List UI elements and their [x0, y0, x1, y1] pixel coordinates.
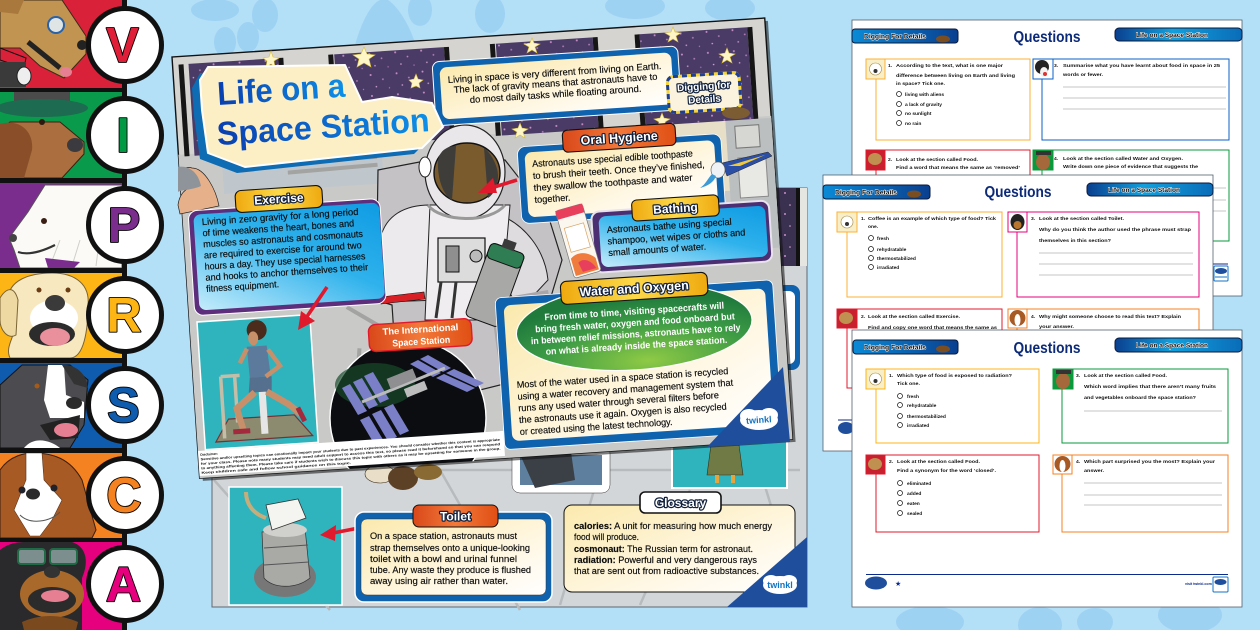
letter: I — [88, 98, 162, 172]
text: oral hygiene: to brush their teeth. Once they’ve finished, — [533, 159, 705, 181]
mud piles — [365, 464, 442, 490]
disclaimer strip: Keep children safe and follow school guidance on this topic. — [201, 461, 351, 475]
letter: P: P — [108, 199, 140, 253]
question 1: fresh — [907, 394, 919, 400]
header: life on a space station — [1115, 28, 1242, 41]
heading: glossary: Glossary — [655, 496, 707, 510]
question 4 — [1008, 309, 1199, 369]
panel: intro — [432, 46, 682, 126]
twinkl corner: back page: twinkl — [767, 580, 793, 590]
text: oral hygiene: they swallow the toothpaste and water — [533, 172, 693, 193]
text: toilet — [370, 530, 531, 586]
question 3: Look at the section called Food. — [1084, 373, 1168, 379]
panel: bathing — [590, 191, 773, 273]
question 1: 1. — [888, 63, 893, 69]
text: water and oxygen: runs any used water through several filters before — [518, 389, 719, 413]
icon: white samoyed dog — [9, 185, 122, 268]
question 2: Find and copy one word that means the same as — [868, 325, 997, 331]
text: glossary: food will produce. — [574, 531, 639, 542]
question 3: Summarise what you have learnt about food in space in 25 — [1063, 63, 1220, 69]
icon: flexed arm — [178, 167, 219, 214]
badge: digging for details — [667, 72, 741, 113]
header: life on a space station: Life on a Space Station — [1108, 187, 1180, 194]
heading: bathing: Bathing — [653, 200, 698, 217]
header: digging for details — [852, 29, 958, 43]
letter: P — [88, 188, 162, 262]
green ellipse callout: on what is already inside the space station. — [545, 334, 728, 357]
header: digging for details — [823, 185, 930, 199]
letter: C: C — [106, 469, 142, 523]
twinkl corner: front page — [707, 367, 790, 447]
image: runner on treadmill — [197, 315, 318, 450]
question 2: Find a word that means the same as ‘removed’ — [896, 165, 1021, 171]
question 1: difference between living on Earth and living — [896, 73, 1015, 79]
arrow: to astronaut — [478, 178, 517, 193]
text: bathing: small amounts of water. — [608, 241, 706, 258]
disclaimer strip: Disclaimer: — [200, 452, 218, 457]
question 1: rehydratable — [877, 247, 907, 253]
header: life on a space station — [1087, 183, 1213, 196]
label: international space station: The International — [382, 321, 459, 337]
letter: A: A — [106, 558, 141, 612]
question 4 — [1033, 150, 1229, 241]
heading: toilet — [413, 505, 498, 527]
text: exercise: muscles so astronauts and cosmonauts — [203, 228, 364, 249]
question 4: Look at the section called Water and Oxygen. — [1063, 156, 1184, 162]
icon: shampoo bottle — [555, 203, 601, 278]
text: water and oxygen: the astronauts use it again. Oxygen is also recycled — [519, 401, 727, 425]
heading: exercise — [235, 185, 323, 213]
text: bathing — [606, 215, 746, 258]
question 3: Which word implies that there aren’t many fruits — [1084, 384, 1216, 390]
header: digging for details: Digging For Details — [864, 34, 926, 40]
footer: ★ — [895, 580, 901, 588]
icon: cavalier spaniel dog — [0, 453, 96, 538]
badge: digging for details: Digging for — [677, 80, 731, 94]
question 1 — [866, 369, 1039, 443]
question 3 — [1053, 369, 1228, 443]
question 2: 2. — [889, 459, 894, 465]
question 4: Why might someone choose to read this text? Explain — [1039, 314, 1181, 320]
question 2: eliminated — [907, 481, 931, 487]
heading: water and oxygen: Water and Oxygen — [579, 278, 689, 299]
question 4 — [1053, 455, 1228, 532]
question 1: no sunlight — [905, 111, 932, 117]
panel fragment: blue framed box — [752, 285, 800, 370]
text: exercise: fitness equipment. — [206, 278, 279, 294]
panel: glossary — [564, 492, 795, 592]
twinkl corner: front page: twinkl — [746, 414, 772, 426]
text: bathing: Astronauts bathe using special — [606, 216, 732, 235]
question 4: Write down one piece of evidence that suggests the — [1063, 164, 1198, 170]
text: toilet: tube. Any waste they produce is flushed — [370, 564, 531, 575]
letter: S — [88, 368, 162, 442]
icon: badge — [1214, 266, 1228, 281]
disclaimer strip: to anything affecting them. Please take care if students wish to discuss this topic with others as it may be upsetting for someone in the group. — [201, 447, 501, 470]
question 1 — [837, 212, 1002, 297]
text: toilet: strap themselves onto a unique-looking — [370, 542, 530, 553]
question 3: words or fewer. — [1062, 72, 1104, 78]
heading: bathing — [631, 195, 720, 221]
poster background — [172, 18, 796, 481]
text: water and oxygen: or created using the latest technology. — [519, 416, 673, 437]
question 1: no rain — [905, 121, 921, 127]
question 4: 4. — [1031, 314, 1036, 320]
text: toilet: toilet with a bowl and urinal funnel — [370, 553, 517, 564]
question 4: 4. — [1054, 156, 1059, 162]
question 2: Find a synonym for the word ‘closed’. — [897, 468, 997, 474]
heading: glossary — [640, 492, 721, 513]
text: exercise: are required to exercise for around two — [204, 239, 362, 261]
letter: A — [88, 548, 162, 620]
question 2: sealed — [907, 511, 922, 517]
footer — [865, 574, 1228, 592]
text: water and oxygen: Most of the water used in a space station is recycled — [516, 365, 729, 390]
question 3: Why do you think the author used the phrase must strap — [1039, 227, 1191, 233]
question 1 — [866, 59, 1030, 140]
disclaimer strip: Sensitive and/or upsetting topics can emotionally impact your students due to past experiences. You should consider whether this content is appropriate — [200, 438, 500, 461]
worksheet page 3 — [852, 330, 1242, 607]
label: international space station: Space Station — [392, 334, 451, 348]
header: digging for details: Digging For Details — [835, 190, 897, 196]
text: intro — [447, 60, 663, 106]
question 4: 4. — [1076, 459, 1081, 465]
question 4: Which part surprised you the most? Explain your — [1084, 459, 1215, 465]
icon: bloodhound dog with hat — [0, 92, 88, 178]
header: digging for details: Digging For Details — [864, 344, 926, 352]
question 4: your answer. — [1039, 324, 1075, 330]
question 3: 3. — [1054, 63, 1059, 69]
VIPERS strip with dogs — [0, 0, 162, 630]
question 3: 3. — [1076, 373, 1081, 379]
footer logo — [838, 420, 854, 434]
letter: S: S — [107, 379, 140, 433]
icon: golden retriever dog — [0, 273, 88, 358]
text: oral hygiene: Astronauts use special edible toothpaste — [532, 147, 693, 169]
header: life on a space station: Life on a Space Station — [1136, 342, 1208, 350]
icon: border collie dog — [0, 365, 88, 448]
text: oral hygiene: together. — [534, 192, 571, 205]
text: water and oxygen — [516, 365, 736, 437]
text: exercise: and hooks to anchor themselves to their — [205, 261, 368, 283]
icon: toothpaste tube — [700, 152, 772, 188]
worksheet page 1 — [852, 20, 1242, 296]
green ellipse callout: in between relief missions, astronauts have to rely — [531, 321, 742, 346]
question 3: themselves in this section? — [1039, 238, 1111, 244]
image: toilet on teal — [229, 487, 342, 605]
question 2: Look at the section called Exercise. — [868, 314, 961, 320]
panel: exercise — [187, 181, 386, 316]
text: exercise: Living in zero gravity for a long period — [201, 206, 359, 227]
question 2: Look at the section called Food. — [896, 157, 979, 163]
twinkl corner: back page — [727, 537, 807, 607]
question 1: irradiated — [877, 265, 899, 271]
question 2: Look at the section called Food. — [897, 459, 981, 465]
text: oral hygiene — [532, 147, 706, 205]
heading: questions: Questions — [1014, 340, 1081, 357]
question 2 — [837, 309, 1002, 388]
question 1: 1. — [889, 373, 894, 379]
question 4: answer. — [1084, 468, 1105, 474]
white panel fragment with machinery — [512, 445, 610, 493]
question 1: irradiated — [907, 423, 929, 429]
text: exercise: of time weakens the heart, bones and — [202, 217, 354, 238]
heading: questions: Questions — [1014, 29, 1081, 46]
header: life on a space station — [1115, 338, 1242, 352]
panel: water and oxygen — [494, 268, 782, 450]
image fragment: teal panel with figure — [672, 430, 787, 488]
question 1: thermostabilized — [877, 256, 916, 262]
heading: toilet: Toilet — [440, 510, 471, 524]
green ellipse callout: bring fresh water, oxygen and food onboard but — [535, 310, 735, 334]
footer line — [1213, 263, 1228, 265]
text: exercise — [201, 205, 369, 294]
text: glossary: calories: A unit for measuring how much energy — [574, 520, 772, 531]
disclaimer strip — [198, 431, 505, 476]
text: glossary — [574, 520, 772, 576]
question 2: 2. — [861, 314, 866, 320]
text: toilet: away using air rather than water. — [370, 575, 508, 586]
question 1: 1. — [861, 216, 866, 222]
letter: R — [88, 278, 162, 352]
footer: visit twinkl.com — [1185, 582, 1212, 586]
panel: oral hygiene — [516, 120, 726, 224]
question 1: one. — [868, 225, 879, 230]
letter: R: R — [106, 289, 142, 343]
title: Life on a — [216, 67, 347, 112]
question 1: Which type of food is exposed to radiation? — [897, 373, 1012, 379]
question 3: Look at the section called Toilet. — [1039, 216, 1125, 222]
letter: C — [88, 458, 162, 532]
stars — [263, 27, 735, 138]
header: digging for details — [853, 340, 958, 354]
text: glossary: that are sent out from radioactive substances. — [574, 565, 759, 576]
icon: rottweiler dog with glasses — [0, 542, 86, 630]
poster page: back page with toilet and glossary — [212, 188, 807, 610]
text: intro: do most daily tasks while floating around. — [469, 83, 642, 105]
image: international space station — [329, 348, 487, 469]
question 2 — [866, 455, 1039, 532]
heading: water and oxygen — [560, 272, 708, 305]
question 1: rehydratable — [907, 403, 937, 409]
astronaut illustration — [376, 125, 562, 390]
question 1: According to the text, what is one major — [896, 63, 1003, 69]
text: glossary: radiation: Powerful and very dangerous rays — [574, 554, 757, 565]
icon: mud pile — [722, 107, 750, 119]
icon: oxygen tank — [465, 235, 528, 328]
panel: toilet — [355, 505, 552, 602]
heading: exercise: Exercise — [254, 190, 304, 208]
question 2: eaten — [907, 501, 920, 507]
letter: V — [88, 8, 162, 82]
question 1: in space? Tick one. — [896, 81, 946, 87]
header: life on a space station: Life on a Space Station — [1136, 32, 1208, 39]
heading: questions: Questions — [984, 184, 1052, 201]
disclaimer strip: for your class. Please note many students may need adult support to access this text, so please read it beforehand so that you can respond — [201, 442, 500, 466]
question 3 — [1008, 212, 1199, 297]
question 1: Coffee is an example of which type of food? Tick — [868, 216, 996, 222]
text: intro: Living in space is very different from living on Earth. — [447, 60, 662, 85]
letter: I: I — [116, 109, 130, 163]
heading: oral hygiene: Oral Hygiene — [580, 129, 658, 148]
text: exercise: hours a day. They use special harnesses — [204, 250, 366, 272]
question 3: and vegetables onboard the space station? — [1084, 395, 1196, 401]
arrow: to treadmill — [298, 287, 327, 330]
letter: V: V — [106, 19, 139, 73]
badge: digging for details: Details — [688, 93, 722, 107]
label: international space station — [368, 318, 473, 352]
poster page: main front page — [172, 18, 796, 496]
title — [192, 61, 443, 173]
green ellipse callout — [514, 276, 755, 378]
question 3: 3. — [1031, 216, 1036, 222]
text: glossary: cosmonaut: The Russian term for astronaut. — [574, 543, 753, 554]
question 1: a lack of gravity — [905, 102, 942, 108]
question 2: 2. — [888, 157, 893, 163]
question 1: fresh — [877, 236, 889, 242]
worksheet page 2 — [823, 175, 1213, 451]
heading: oral hygiene — [562, 123, 676, 152]
text: bathing: shampoo, wet wipes or cloths and — [607, 226, 746, 246]
text: water and oxygen: using a water recovery and management system that — [517, 377, 734, 402]
text: toilet: On a space station, astronauts must — [370, 530, 517, 541]
question 2: added — [907, 491, 921, 497]
question 1: living with aliens — [905, 92, 944, 98]
title: Space Station — [216, 101, 431, 152]
green ellipse callout: From time to time, visiting spacecrafts will — [544, 300, 724, 322]
question 1: Tick one. — [897, 381, 921, 387]
arrow: to toilet — [320, 525, 369, 541]
icon: terrier dog with glasses — [0, 0, 87, 87]
question 3 — [1033, 59, 1229, 140]
question 1: thermostabilized — [907, 414, 946, 420]
question 2 — [866, 150, 1030, 190]
text: intro: The lack of gravity means that astronauts have to — [453, 71, 658, 95]
